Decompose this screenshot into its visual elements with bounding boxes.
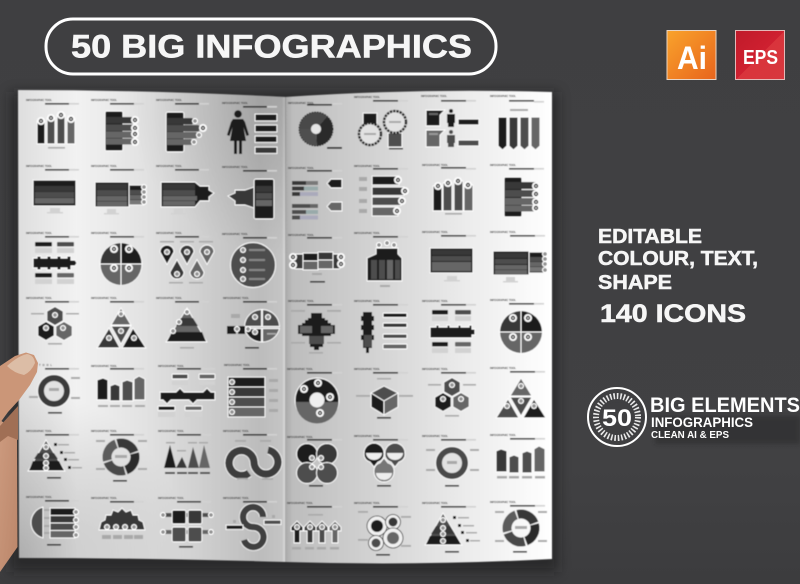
infographic: cog half [91,496,145,539]
left page [18,90,286,562]
icon: EPS badge: EPS [743,47,778,69]
infographic: half circle list [26,495,79,546]
badge and elements logo [588,388,800,446]
infographic: tower block: INFOGRAPHIC TOOL [354,231,380,235]
infographic: segmented ring: INFOGRAPHIC TOOL [91,429,117,433]
infographic: puzzle strip two: INFOGRAPHIC TOOL [422,299,448,303]
infographic: connector band [288,233,345,283]
infographic: vertical S: INFOGRAPHIC TOOL [223,496,249,500]
logo text: CLEAN AI & EPS [651,430,729,441]
infographic: phone funnel [222,165,277,219]
infographic: puzzle strip [26,231,79,284]
infographic: pyramid with bullets two [422,501,480,553]
infographic: quadrant circle: INFOGRAPHIC TOOL [91,231,117,235]
infographic: segmented ring two [490,500,547,553]
infographic: half circle quadrants [223,296,280,349]
title pill [46,19,496,74]
infographic: puzzle cross [288,299,342,354]
infographic: monitor circles two: INFOGRAPHIC TOOL [490,230,516,234]
infographic: pillars: INFOGRAPHIC TOOL [26,98,52,102]
infographic: pie donut: INFOGRAPHIC TOOL [288,101,314,105]
infographic: pyramid with bullets two: INFOGRAPHIC TOOL [422,501,448,505]
infographic: quadrant circle [91,231,144,286]
infographic: phone list: INFOGRAPHIC TOOL [91,98,117,102]
infographic: monitor bands: INFOGRAPHIC TOOL [26,164,52,168]
infographic: monitor funnel [156,164,214,214]
infographic: hexagons: INFOGRAPHIC TOOL [26,296,52,300]
infographic: phone list two [490,163,544,217]
infographic: ring with labels two [422,434,479,487]
infographic: three pins: INFOGRAPHIC TOOL [354,434,380,438]
infographic: hexagons two [422,367,476,417]
infographic: phone funnel: INFOGRAPHIC TOOL [222,165,248,169]
infographic: triangles two [490,366,546,418]
infographic: layered pyramid [156,296,209,349]
feature text block: EDITABLE [598,225,702,248]
infographic: pillars [26,98,79,149]
infographic: cylinder bars [91,364,145,407]
infographic: pillars two: INFOGRAPHIC TOOL [422,163,448,167]
infographic: hexagons [26,296,79,345]
infographic: four rounded tiles: INFOGRAPHIC TOOL [158,496,184,500]
thumbnail [7,354,35,375]
title text: 50 BIG INFOGRAPHICS [71,28,472,64]
infographic: quadrant circle two [490,298,544,354]
infographic: male figures [421,94,479,147]
infographic: keyhole cogs: INFOGRAPHIC TOOL [354,95,380,99]
palm [0,420,18,572]
infographic: male figures: INFOGRAPHIC TOOL [421,94,447,98]
infographic: teardrops: INFOGRAPHIC TOOL [156,231,182,235]
infographic: triangles: INFOGRAPHIC TOOL [91,296,117,300]
infographic: timeline pins [158,364,215,417]
hand holding the brochure [0,352,38,572]
infographic: tower block [354,231,408,287]
infographic: quadrant circle two: INFOGRAPHIC TOOL [490,298,516,302]
feature text block: SHAPE [598,271,672,294]
infographic: arrow tags: INFOGRAPHIC TOOL [490,94,516,98]
icon: round 50 laurel seal: 50 [602,405,632,432]
icon: EPS badge [736,30,784,80]
icon: Ai badge: Ai [677,40,707,76]
thumb [0,352,38,423]
page shading lower left [18,90,286,562]
icon: Ai badge [667,30,716,80]
infographic: list in circle: INFOGRAPHIC TOOL [222,232,248,236]
infographic: donut with markers [287,367,342,424]
panel: open brochure [18,90,552,563]
paper shadow [10,92,558,572]
infographic: woman figure [222,101,277,154]
infographic: band list with circles: INFOGRAPHIC TOOL [354,164,380,168]
infographic: connector band: INFOGRAPHIC TOOL [288,233,314,237]
infographic: cylinder bars: INFOGRAPHIC TOOL [91,364,117,368]
infographic: segmented ring two: INFOGRAPHIC TOOL [490,500,516,504]
infographic: woman figure: INFOGRAPHIC TOOL [222,101,248,105]
infographic: phone list two: INFOGRAPHIC TOOL [490,163,516,167]
infographic: pie donut [288,101,342,149]
infographic: arrows up: INFOGRAPHIC TOOL [287,501,313,505]
infographic: monitor bands two [422,230,476,282]
right page [285,91,552,563]
infographic: half circle quadrants: INFOGRAPHIC TOOL [223,296,249,300]
infographic: triangles [91,296,146,348]
infographic: phone arrows: INFOGRAPHIC TOOL [156,98,182,102]
infographic: S curve: INFOGRAPHIC TOOL [223,429,249,433]
infographic: spike chart [158,429,211,474]
infographic: pillars two [422,163,476,215]
infographic: keyhole cogs [354,95,408,150]
infographic: spike chart: INFOGRAPHIC TOOL [158,429,184,433]
feature text block: COLOUR, TEXT, [598,247,758,270]
infographic: arrow tags [490,94,544,150]
infographic: ringed circles: INFOGRAPHIC TOOL [354,501,380,505]
infographic: monitor circles [91,164,147,214]
infographic: ring with labels [29,363,80,414]
logo text [650,394,800,441]
infographic: half circle list: INFOGRAPHIC TOOL [26,495,52,499]
infographic: cylinder bars two: INFOGRAPHIC TOOL [490,433,516,437]
infographic: ring with labels: TOOL [39,363,52,367]
infographic: four rounded tiles [158,496,214,548]
infographic: vertical puzzle: INFOGRAPHIC TOOL [354,299,380,303]
infographic: hexagons two: INFOGRAPHIC TOOL [422,367,448,371]
infographic: pyramid with bullets: INFOGRAPHIC TOOL [26,429,52,433]
infographic: monitor circles two [490,230,548,282]
infographic: puzzle strip two [422,299,476,353]
infographic: cylinder bars two [490,433,545,478]
infographic: four overlapping circles: INFOGRAPHIC TOOL [287,435,313,439]
infographic: cog half: INFOGRAPHIC TOOL [91,496,117,500]
infographic: monitor circles: INFOGRAPHIC TOOL [91,164,117,168]
infographic: phone arrows [156,98,209,152]
infographic: vertical S [223,496,281,547]
infographic: phone list [91,98,144,151]
infographic: people grid: INFOGRAPHIC TOOL [288,166,314,170]
infographic: pyramid with bullets [26,429,82,479]
infographic: S curve [223,429,278,480]
feature text block [598,225,758,328]
icon: round 50 laurel seal [588,388,646,446]
feature text block: 140 ICONS [600,300,746,328]
infographic: people grid [288,166,342,220]
infographic: timeline pins: INFOGRAPHIC TOOL [158,364,184,368]
logo text: INFOGRAPHICS [651,414,753,430]
infographic: ring with labels two: INFOGRAPHIC TOOL [422,434,448,438]
infographic: vertical puzzle [354,299,408,353]
infographic: cube [354,367,413,419]
infographic: triangles two: INFOGRAPHIC TOOL [490,366,516,370]
infographic: monitor bands [26,164,79,214]
infographic: list in circle [222,232,277,288]
shadow under thumb [0,406,18,442]
infographic: arrows up [287,501,342,550]
infographic: puzzle cross: INFOGRAPHIC TOOL [288,299,314,303]
infographic: donut with markers: INFOGRAPHIC TOOL [287,367,313,371]
infographic: list block [224,363,278,417]
infographic: layered pyramid: INFOGRAPHIC TOOL [156,296,182,300]
infographic: band list with circles [354,164,409,216]
infographic: cube: INFOGRAPHIC TOOL [354,367,380,371]
infographic: list block: INFOGRAPHIC TOOL [224,363,250,367]
infographic: monitor bands two: INFOGRAPHIC TOOL [422,230,448,234]
infographic: three pins [354,434,408,487]
infographic: ringed circles [354,501,411,556]
infographic: segmented ring [91,429,147,482]
page shading upper spine [18,90,286,562]
infographic: teardrops [156,231,214,284]
infographic: four overlapping circles [287,435,342,487]
infographic: monitor funnel: INFOGRAPHIC TOOL [156,164,182,168]
infographic: puzzle strip: INFOGRAPHIC TOOL [26,231,52,235]
